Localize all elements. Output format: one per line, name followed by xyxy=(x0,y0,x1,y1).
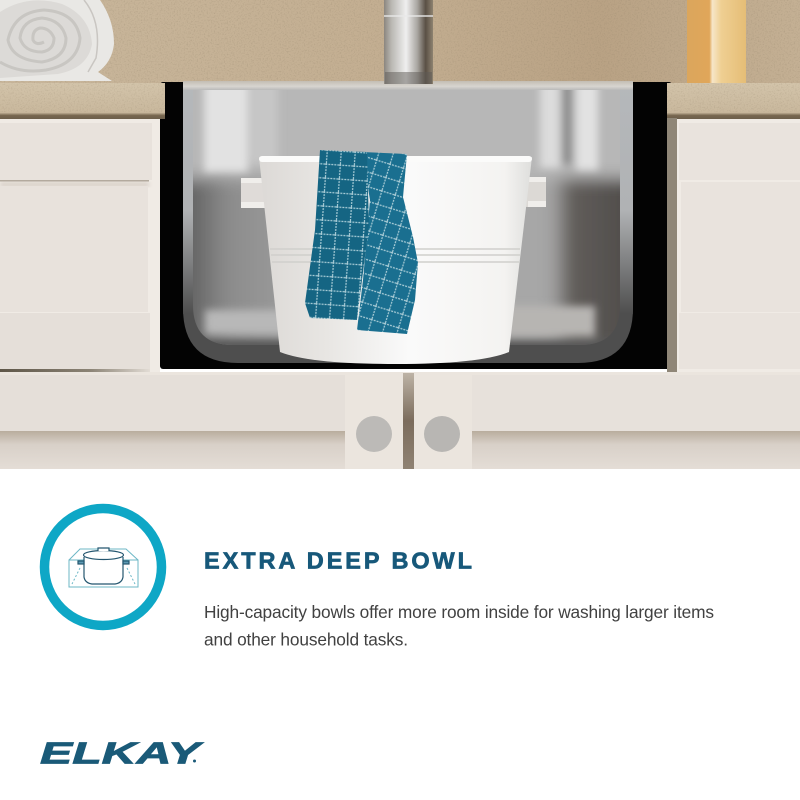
icon: pot inside deep bowl xyxy=(44,508,162,626)
left countertop xyxy=(0,83,165,119)
Elkay logo: ELKAY xyxy=(40,736,205,770)
description text xyxy=(204,602,714,650)
icon ring xyxy=(44,508,162,626)
stainless steel bowl xyxy=(183,90,633,363)
right countertop xyxy=(667,83,800,119)
left cabinet knob xyxy=(356,416,392,452)
Elkay logo xyxy=(40,736,205,770)
blue checked dish towel xyxy=(305,150,418,334)
soap bottle xyxy=(687,0,746,83)
heading: EXTRA DEEP BOWL xyxy=(204,548,472,574)
faucet xyxy=(384,0,433,84)
black cut-out behind sink xyxy=(160,82,672,369)
description text: High-capacity bowls offer more room inside for washing larger items xyxy=(204,602,714,622)
lower cabinet rail and doors xyxy=(0,372,800,469)
white bucket xyxy=(241,150,546,364)
left cabinet door xyxy=(0,119,160,375)
backsplash wall xyxy=(0,0,800,84)
sink rim xyxy=(183,81,633,90)
description text: and other household tasks. xyxy=(204,630,408,650)
rolled white towel xyxy=(0,0,114,81)
right bucket handle xyxy=(525,177,546,207)
icon: cooking pot xyxy=(78,548,129,584)
kitchen sink photo xyxy=(0,0,800,469)
right cabinet door xyxy=(667,118,800,375)
right cabinet knob xyxy=(424,416,460,452)
left bucket handle xyxy=(241,178,307,208)
icon: bowl outline xyxy=(69,549,138,587)
